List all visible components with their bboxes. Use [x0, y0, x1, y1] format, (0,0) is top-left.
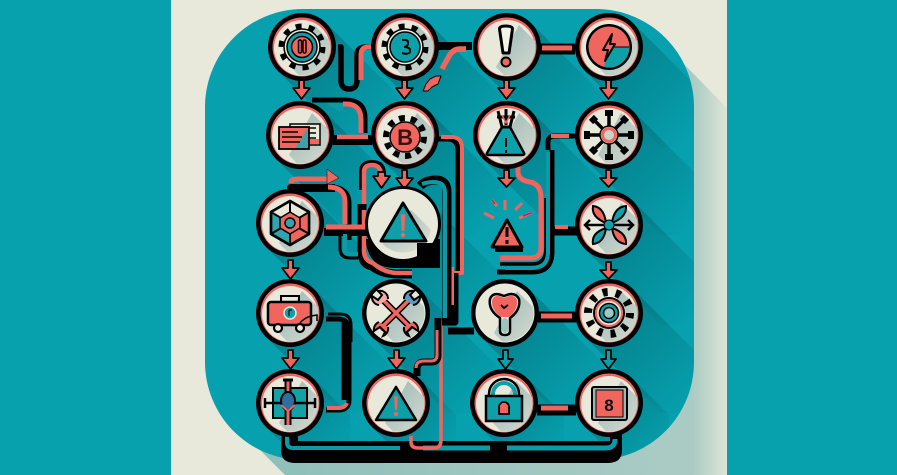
node: gear target	[575, 279, 643, 347]
arrow	[282, 260, 299, 279]
pipe: top row 3 to 4	[540, 44, 575, 54]
arrow	[498, 170, 515, 187]
pipe: top row 2 to 3	[438, 42, 472, 50]
pipe: bottom bus	[281, 430, 622, 463]
node: crossed wrenches	[362, 279, 430, 347]
pipe: row 4 to row 5 at left	[326, 319, 349, 410]
long drop shadow below rounded square	[250, 420, 660, 475]
arrow	[600, 170, 617, 187]
node: numbered box	[575, 369, 643, 437]
pipe: row 5 right	[537, 404, 576, 416]
arrow	[498, 80, 515, 99]
pipe: return loop into warning node	[361, 162, 384, 190]
node: flask warning	[473, 101, 541, 169]
node: exclamation mark	[473, 13, 541, 81]
arrow	[396, 80, 413, 99]
arrow	[388, 350, 405, 369]
node: lightning gauge	[575, 13, 643, 81]
node: bitcoin gear: B	[397, 125, 413, 150]
arrow	[293, 80, 310, 99]
node: padlock	[470, 369, 538, 437]
arrow: teal	[601, 350, 616, 369]
connector pipes: black, teal and coral network	[281, 46, 622, 463]
pipe: row 4 right	[538, 312, 576, 322]
pipe: row 2 link with teal block	[325, 102, 343, 111]
arrow	[396, 170, 413, 189]
node: warning triangle	[362, 369, 430, 437]
node: numbered box: 8	[604, 396, 614, 415]
node: crossed tools frame	[256, 369, 324, 437]
arrow	[600, 262, 617, 279]
node: virus hub	[575, 101, 643, 169]
node: gear with coin	[371, 13, 439, 81]
long drop shadow right of rounded square	[660, 60, 727, 475]
node: flower with arrows	[575, 191, 643, 259]
pipe: long vertical from node 2-2	[438, 139, 458, 273]
node: document cards	[266, 101, 334, 169]
pipe: row 3 right around small warning	[500, 165, 541, 258]
node: large warning triangle	[365, 186, 443, 268]
node: bitcoin gear	[371, 101, 439, 169]
arrow	[282, 350, 299, 369]
pipe: coral sweep under warning node	[362, 204, 412, 274]
arrow: teal	[498, 350, 513, 369]
pipe: left node to warning	[330, 187, 349, 240]
panel: teal rounded square	[205, 9, 694, 460]
pipe: arrow above left node	[291, 188, 335, 192]
node: hexagon gem	[256, 189, 324, 257]
icon: small warning with burst	[484, 200, 531, 250]
node: tanker	[256, 279, 324, 347]
pipe: teal loop to right of warning node	[420, 180, 447, 320]
node: heart key	[471, 279, 539, 347]
arrow	[600, 80, 617, 99]
long shadows cast by the nodes	[266, 23, 709, 463]
arrows between nodes	[282, 80, 617, 369]
arrow: return loop head	[373, 172, 390, 188]
pipe: top row 1 to 2	[338, 47, 370, 89]
panel: beige centre column	[171, 0, 727, 475]
node: gear with pill	[268, 13, 336, 81]
